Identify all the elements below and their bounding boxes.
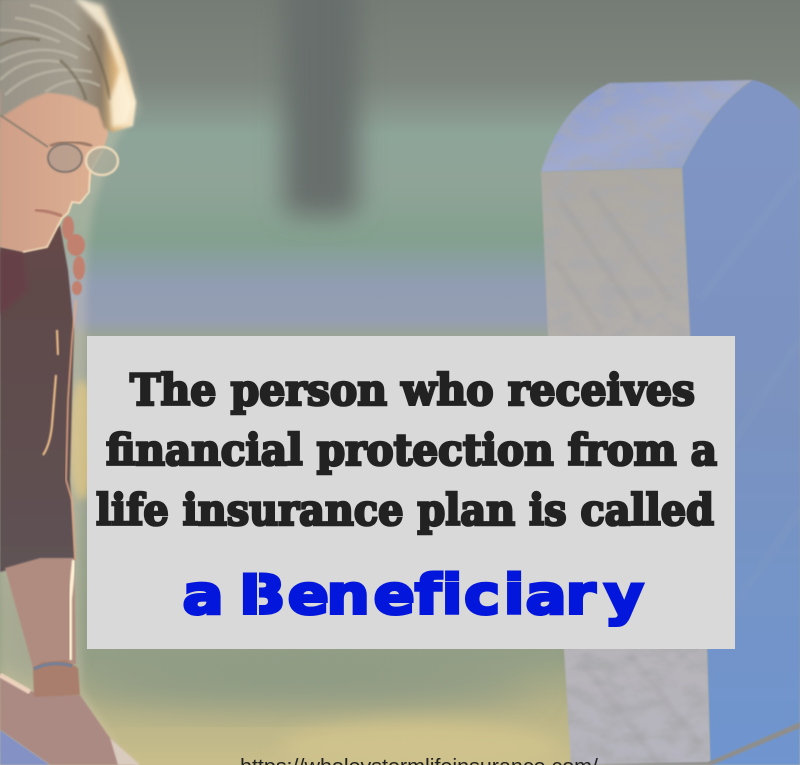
glasses: [0, 115, 118, 175]
tombstone base edge: [572, 722, 800, 765]
tombstone side face: [541, 168, 710, 765]
hand and arm: [0, 676, 135, 765]
rim light on forearm: [70, 560, 74, 660]
red bead necklace: [62, 216, 85, 295]
tombstone top face: [541, 80, 753, 172]
wrist watch: [33, 660, 80, 697]
sleeve rim light: [43, 330, 58, 455]
woman looking down: [0, 0, 140, 765]
hair strands: [0, 5, 100, 95]
tombstone: [541, 80, 800, 765]
hand edge highlight: [110, 738, 140, 765]
text panel: [87, 336, 735, 649]
wrist highlight: [0, 675, 30, 692]
heading: definition text: financial protection from a: [106, 426, 717, 476]
soft halo around figure: [0, 0, 140, 765]
highlighted term: a Beneficiary: [182, 564, 644, 627]
tombstone front face: [682, 80, 800, 765]
blue sleeve corner: [0, 730, 50, 765]
face rim light: [23, 150, 103, 252]
dark sweater: [0, 225, 75, 572]
heading: definition text: life insurance plan is called: [96, 486, 714, 536]
face: [0, 90, 108, 252]
hair: [0, 0, 136, 132]
hair dark strands: [0, 35, 110, 100]
hair bright rim: [72, 0, 133, 128]
sweater edge rim light: [66, 300, 76, 560]
brow shadow: [50, 142, 92, 146]
forearm: [5, 558, 76, 668]
heading: definition text: The person who receives: [130, 366, 695, 416]
watch strap: [34, 664, 72, 669]
mouth shadow: [35, 210, 62, 216]
collar: [0, 250, 28, 315]
heading: definition text: [96, 366, 717, 536]
